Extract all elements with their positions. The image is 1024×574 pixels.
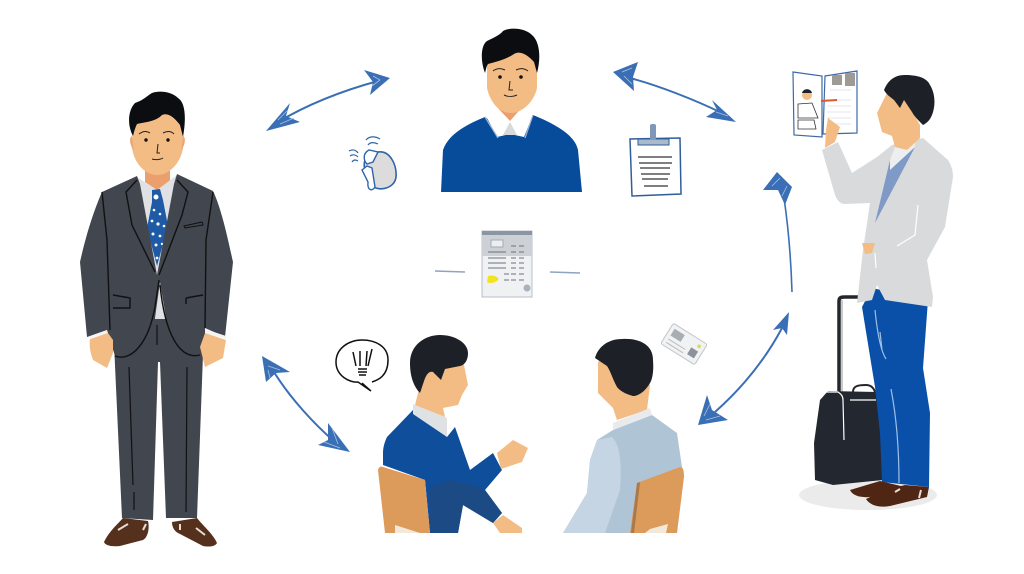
arrow: vertical right side xyxy=(763,172,792,292)
dress shirt xyxy=(137,175,177,319)
blue polka-dot tie xyxy=(147,189,168,266)
figure: standing man in dark suit xyxy=(80,92,233,547)
trousers xyxy=(112,300,205,520)
black hair xyxy=(129,92,185,137)
figure: right man with suitcase xyxy=(799,75,953,510)
sweater xyxy=(563,415,682,533)
icon: central document with table xyxy=(482,231,532,297)
sweater xyxy=(383,410,502,533)
icon: clipboard with notes xyxy=(630,124,681,196)
arrow: right man to seated pair xyxy=(698,312,789,425)
head and neck xyxy=(415,360,468,417)
blue trousers xyxy=(862,288,930,487)
hands xyxy=(90,333,113,368)
arrow: centre man to right man xyxy=(613,62,736,122)
icon: speech bubble with exclamation marks xyxy=(336,340,388,391)
icon: open booklet with doctor portrait xyxy=(793,71,857,137)
figure: seated man in light blue sweater xyxy=(563,339,684,533)
brown shoes xyxy=(850,481,905,497)
grey jacket xyxy=(822,138,953,307)
collar xyxy=(613,408,652,430)
brown shoes xyxy=(104,518,149,546)
figure: seated man in blue sweater xyxy=(378,335,528,533)
face xyxy=(487,50,537,113)
chair xyxy=(630,467,684,533)
sweater xyxy=(441,115,582,192)
collar xyxy=(413,404,447,437)
neck xyxy=(145,160,170,190)
suitcase body xyxy=(814,391,883,485)
suit jacket xyxy=(80,174,233,357)
pocket hand xyxy=(862,243,875,254)
icon: computer mouse with hand xyxy=(349,137,396,190)
head and neck xyxy=(598,350,650,420)
hair xyxy=(595,339,653,396)
black hair xyxy=(482,29,539,73)
head and neck xyxy=(877,90,920,150)
arrow: seated pair to left man xyxy=(262,356,350,452)
face xyxy=(132,112,183,175)
arrow: left man to centre man xyxy=(266,70,390,131)
divider dash: left of document xyxy=(435,271,465,272)
raised hand xyxy=(825,118,840,148)
chair xyxy=(378,467,430,533)
hair xyxy=(410,335,468,393)
icon: small id card xyxy=(661,323,707,365)
floor shadow xyxy=(799,480,937,510)
blue shirt xyxy=(875,147,915,223)
shirt cuffs xyxy=(88,329,226,339)
white collar xyxy=(486,105,533,137)
hair xyxy=(884,75,934,125)
neck xyxy=(495,100,525,122)
suitcase handle xyxy=(839,297,859,392)
lower hand xyxy=(493,515,522,533)
divider dash: right of document xyxy=(550,272,580,273)
figure: centre man in blue sweater xyxy=(441,29,582,192)
fist xyxy=(497,440,528,469)
